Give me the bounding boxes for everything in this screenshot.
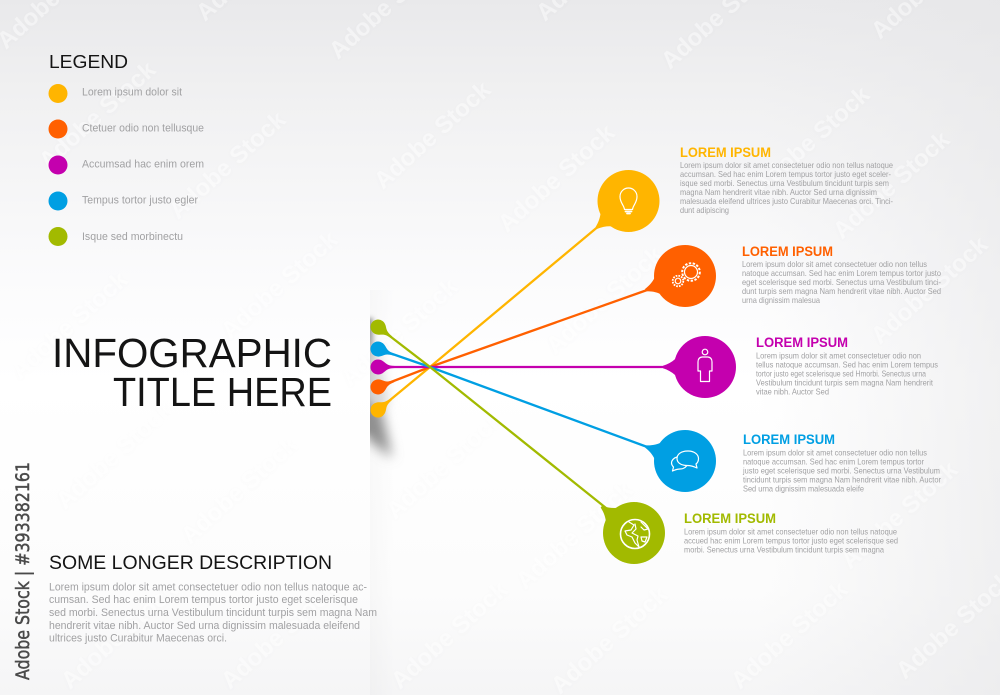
watermark pattern: Adobe Stock <box>748 81 876 199</box>
connector lines <box>378 225 668 508</box>
pin: blue <box>637 422 716 492</box>
body text: accued hac enim Lorem tempus tortor justo eget scelerisque sed <box>684 536 898 546</box>
pin: magenta <box>663 336 736 398</box>
watermark pattern: Adobe Stock <box>511 476 639 594</box>
body text <box>680 160 893 215</box>
body text: dunt turpis sem magna Nam hendrerit vitae nibh. Auctor Sed <box>742 286 941 296</box>
text block: magenta <box>756 335 938 396</box>
body text: Vestibulum tincidunt turpis sem magna Nam hendrerit <box>756 378 934 388</box>
legend item: yellow: Lorem ipsum dolor sit <box>82 86 182 98</box>
title <box>52 330 332 415</box>
watermark pattern: Adobe Stock <box>164 106 292 224</box>
text block: orange <box>742 244 941 305</box>
legend item: blue <box>48 192 198 210</box>
icon: light bulb <box>620 188 637 214</box>
watermark pattern: Adobe Stock <box>493 119 621 237</box>
body text: natoque accumsan. Sed hac enim Lorem tempus tortor justo <box>742 268 941 278</box>
pin: yellow <box>580 170 660 248</box>
body text: accumsan. Sed hac enim Lorem tempus tortor justo eget sceler- <box>680 169 891 179</box>
text block: yellow <box>680 145 893 215</box>
text block: green <box>684 511 898 555</box>
watermark pattern: Adobe Stock <box>216 576 344 694</box>
legend item: yellow <box>48 84 182 103</box>
watermark pattern: Adobe Stock <box>726 576 854 694</box>
watermark pattern: Adobe Stock <box>866 231 994 349</box>
legend item: blue: Tempus tortor justo egler <box>82 194 198 206</box>
description heading: SOME LONGER DESCRIPTION <box>49 552 332 574</box>
title: INFOGRAPHIC <box>52 330 332 376</box>
body text: Lorem ipsum dolor sit amet consectetuer odio non tellus <box>742 259 927 269</box>
heading: LOREM IPSUM <box>756 335 848 350</box>
heading: LOREM IPSUM <box>684 511 776 526</box>
description text <box>49 582 377 644</box>
legend item: orange <box>48 120 204 138</box>
watermark pattern: Adobe Stock <box>369 76 497 194</box>
title: TITLE HERE <box>113 369 332 415</box>
body text: eget scelerisque sed morbi. Senectus urna Vestibulum tinci- <box>742 277 941 287</box>
panel shadow <box>364 318 392 458</box>
body text: natoque accumsan. Sed hac enim Lorem tempus tortor <box>743 456 924 466</box>
legend item: green <box>48 227 183 246</box>
legend heading: LEGEND <box>49 51 128 72</box>
legend item: magenta <box>48 156 204 174</box>
icon: gears <box>673 263 700 286</box>
watermark pattern: Adobe Stock <box>56 576 184 694</box>
body text: morbi. Senectus urna Vestibulum tincidunt turpis sem magna <box>684 545 884 555</box>
watermark pattern: Adobe Stock <box>386 576 514 694</box>
body text: Lorem ipsum dolor sit amet consectetuer odio non tellus natoque <box>680 160 893 170</box>
description text: cumsan. Sed hac enim Lorem tempus tortor justo eget scelerisque <box>49 594 358 606</box>
body text: justo eget scelerisque sed morbi. Senectus urna Vestibulum <box>742 466 940 476</box>
icon: globe <box>620 520 650 548</box>
pin: orange <box>637 245 716 315</box>
body text <box>742 259 941 305</box>
description <box>49 552 377 644</box>
body text: tortor justo eget scelerisque sed Hmorbi. Senectus urna <box>756 368 926 378</box>
watermark pattern: Adobe Stock <box>216 226 344 344</box>
origin dots <box>367 316 397 421</box>
legend item: orange: Ctetuer odio non tellusque <box>82 122 204 134</box>
body text: tincidunt turpis sem magna Nam hendrerit vitae nibh. Auctor <box>743 474 941 484</box>
watermark pattern: Adobe Stock <box>828 126 956 244</box>
heading: LOREM IPSUM <box>743 432 835 447</box>
icon: chat bubbles <box>672 451 698 471</box>
body text: tellus natoque accumsan. Sed hac enim Lorem tempus <box>756 360 938 370</box>
stock credit: Adobe Stock | #393382161 <box>12 462 34 680</box>
watermark pattern: Adobe Stock <box>34 56 162 174</box>
body text <box>684 527 898 555</box>
body text: Sed urna dignissim malesuada eleife <box>743 484 864 494</box>
body text: vitae nibh. Auctor Sed <box>756 386 829 396</box>
text block: blue <box>742 432 941 494</box>
body text: dunt adipiscing <box>680 205 729 215</box>
watermark pattern: Adobe Stock <box>51 396 179 514</box>
body text <box>742 448 941 494</box>
body text: Lorem ipsum dolor sit amet consectetuer odio non <box>756 350 921 360</box>
body text: magna Nam hendrerit vitae nibh. Auctor Sed urna dignissim <box>680 187 877 197</box>
watermark pattern: Adobe Stock <box>336 273 464 391</box>
legend item: green: Isque sed morbinectu <box>82 231 183 243</box>
body text: urna dignissim malesua <box>742 295 820 305</box>
body text: malesuada eleifend ultrices justo Curabitur Maecenas orci. Tinci- <box>680 196 893 206</box>
heading: LOREM IPSUM <box>742 244 833 259</box>
description text: ultrices justo Curabitur Maecenas orci. <box>49 632 227 644</box>
body text <box>756 350 938 396</box>
watermark pattern: Adobe Stock <box>176 431 304 549</box>
watermark pattern: Adobe Stock <box>6 266 134 384</box>
body text: Lorem ipsum dolor sit amet consectetuer odio non tellus natoque <box>684 527 897 537</box>
pin: green <box>585 486 665 564</box>
watermark pattern: Adobe Stock <box>836 456 964 574</box>
heading: LOREM IPSUM <box>680 145 771 160</box>
legend <box>48 51 204 246</box>
legend item: magenta: Accumsad hac enim orem <box>82 158 204 170</box>
watermark pattern: Adobe Stock <box>541 241 669 359</box>
description text: Lorem ipsum dolor sit amet consectetuer odio non tellus natoque ac- <box>49 582 367 594</box>
icon: person <box>698 349 712 382</box>
body text: Lorem ipsum dolor sit amet consectetuer odio non tellus <box>743 448 927 458</box>
description text: sed morbi. Senectus urna Vestibulum tincidunt turpis sem magna Nam <box>49 607 377 619</box>
watermark pattern: Adobe Stock <box>381 406 509 524</box>
description text: hendrerit vitae nibh. Auctor Sed urna dignissim malesuada eleifend <box>49 620 360 632</box>
body text: isque sed morbi. Senectus urna Vestibulum tincidunt turpis sem <box>680 178 889 188</box>
